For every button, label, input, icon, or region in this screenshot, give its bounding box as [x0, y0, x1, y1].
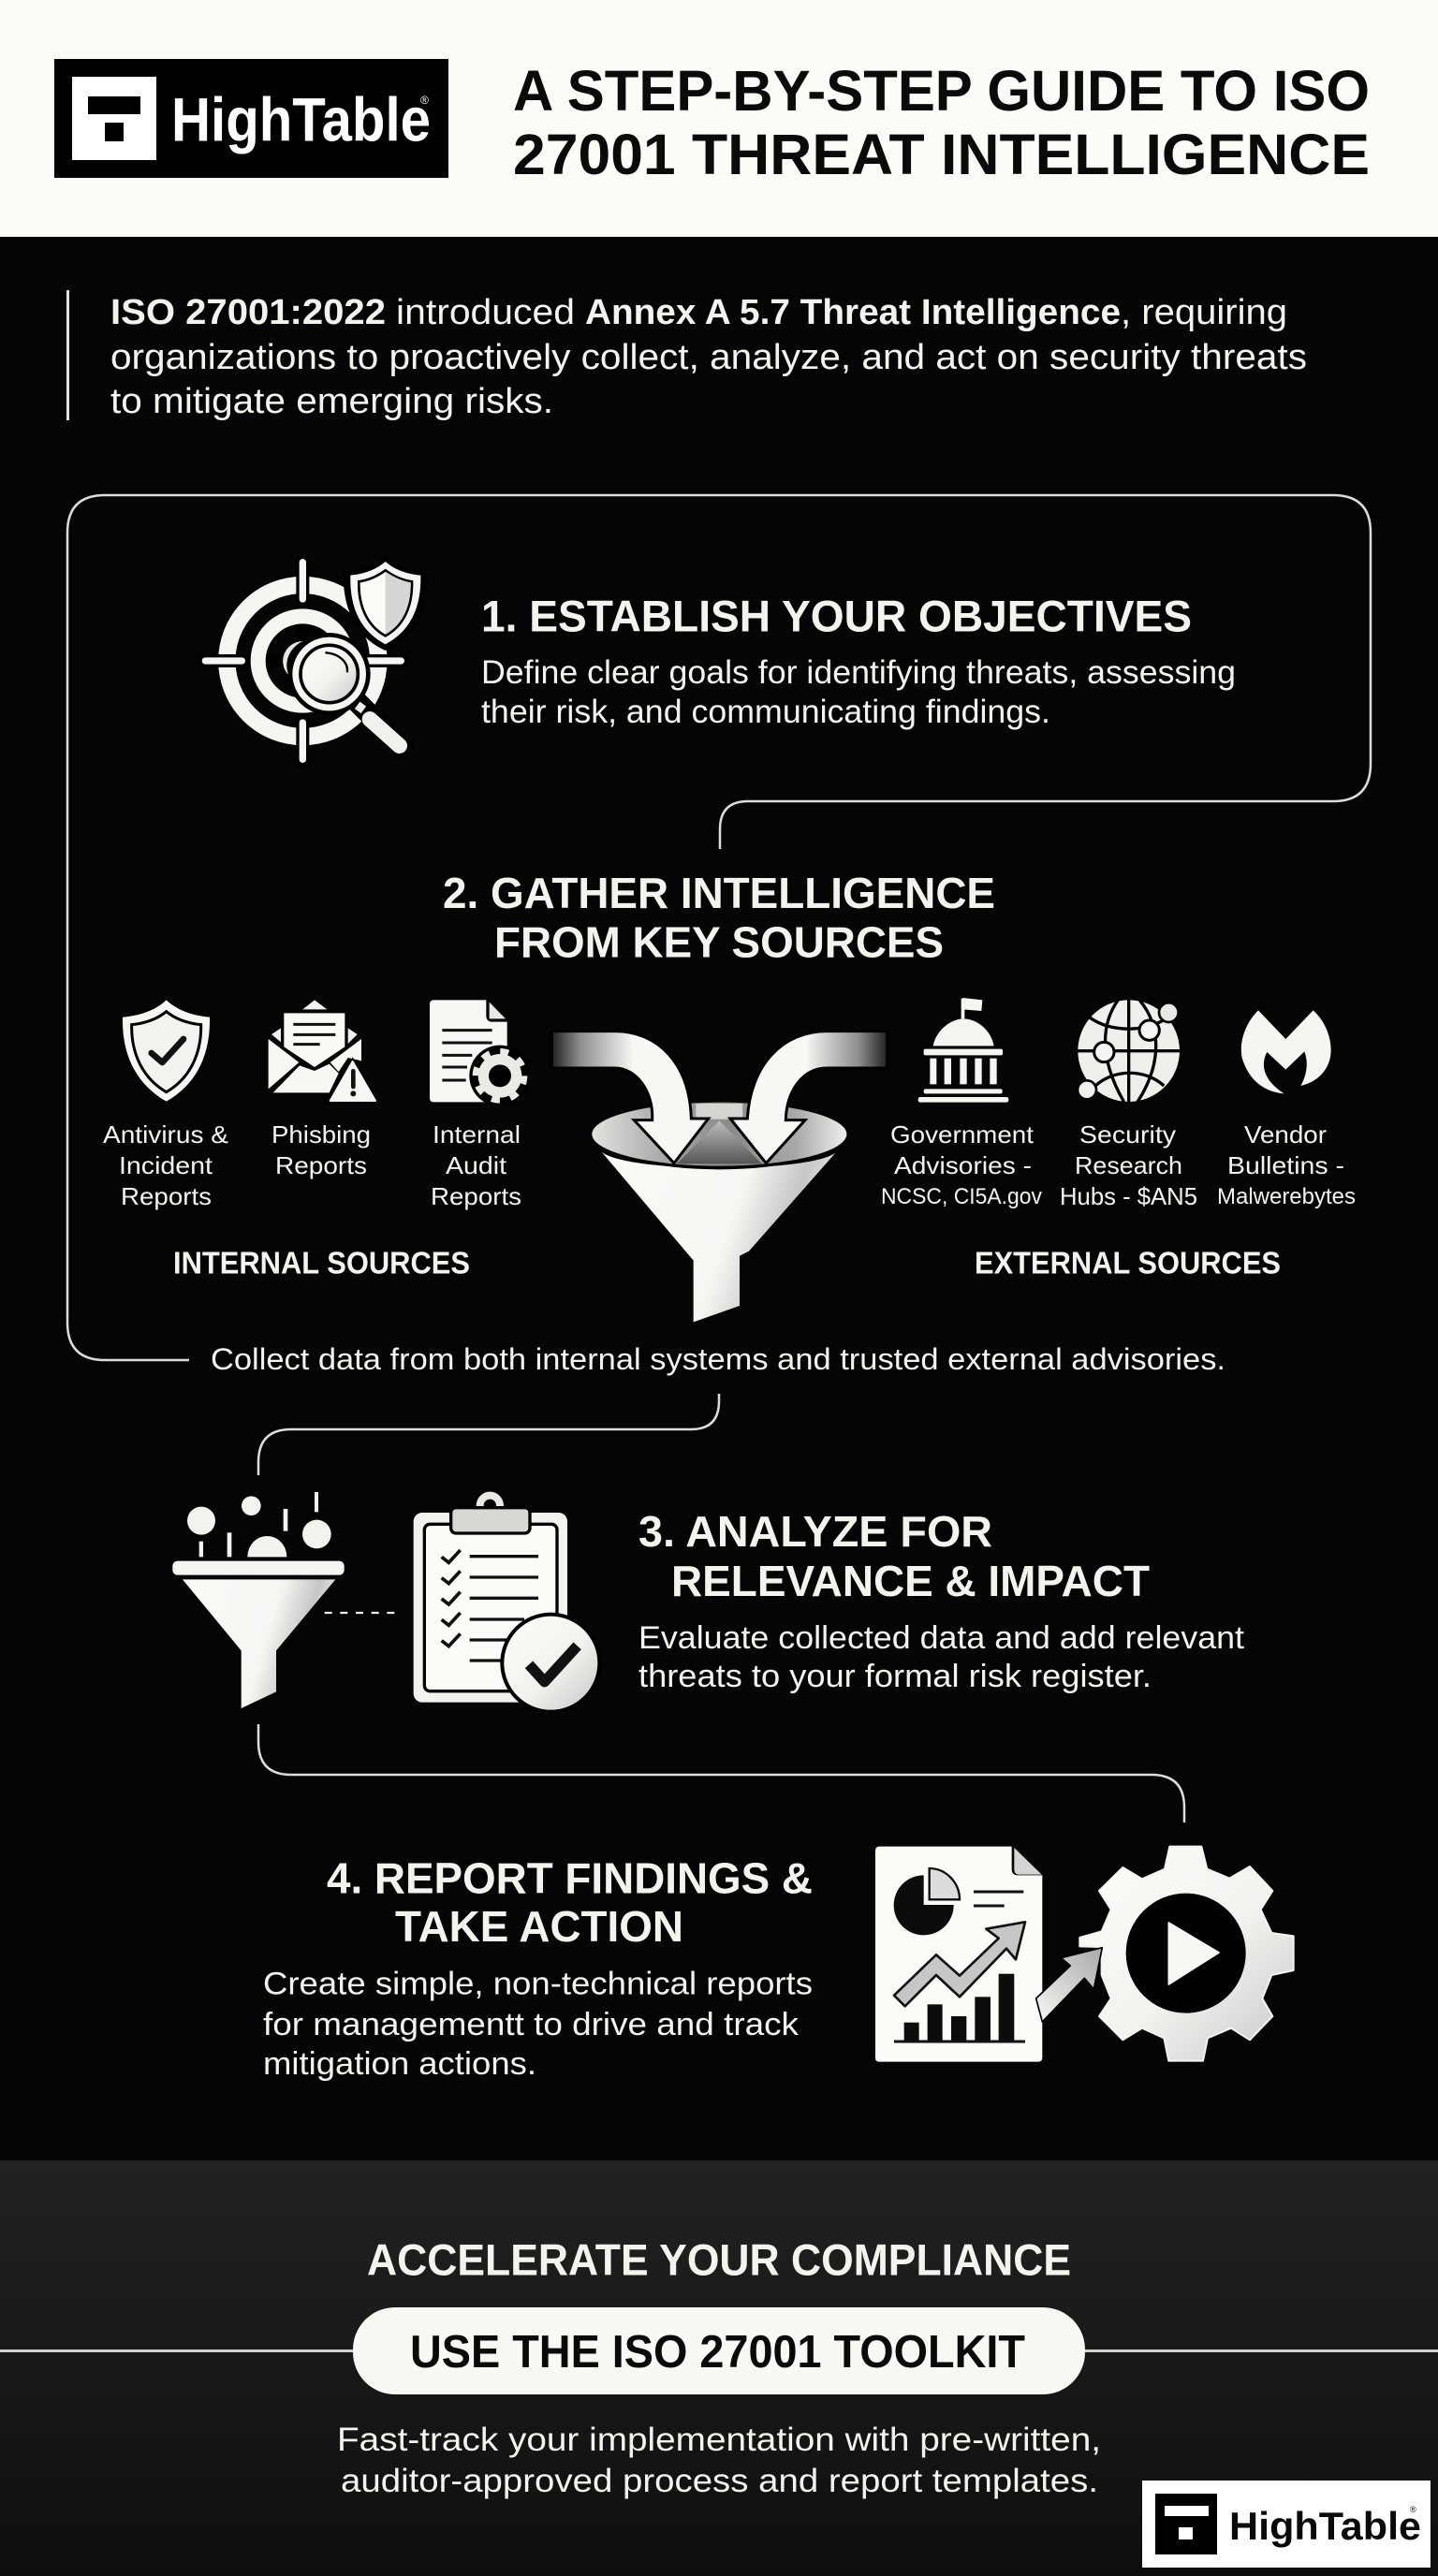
text: internal source labels: Internal [433, 1120, 521, 1149]
title [513, 59, 1370, 186]
arrow: report to action [1036, 1948, 1102, 2022]
icon: central funnel with two arrows [551, 1032, 888, 1322]
icon: target with magnifier and shield [198, 555, 428, 768]
text: internal source labels: Antivirus & [103, 1120, 228, 1149]
heading: step 3: RELEVANCE & IMPACT [671, 1557, 1150, 1605]
text: footer body: Fast-track your implementation with pre-written, [337, 2422, 1101, 2458]
text: footer body [337, 2422, 1101, 2499]
panel: step 3 [172, 1492, 1245, 1714]
heading: step 4: TAKE ACTION [395, 1902, 683, 1951]
button: use the toolkit: USE THE ISO 27001 TOOLKIT [410, 2327, 1025, 2378]
icon: filter funnel with data [172, 1492, 396, 1708]
panel: step 1 [198, 555, 1236, 768]
text: step 1 body [481, 654, 1236, 730]
heading: step 1: 1. ESTABLISH YOUR OBJECTIVES [481, 592, 1192, 640]
logo: HighTable: ® [420, 94, 429, 107]
text: step 4 body: mitigation actions. [263, 2046, 536, 2082]
text: internal source labels: Reports [121, 1182, 212, 1210]
icon: internal audit document with gear [430, 1000, 531, 1106]
icon: report document with charts [875, 1847, 1042, 2062]
panel: footer call to action [0, 2160, 1438, 2576]
heading: internal sources: INTERNAL SOURCES [173, 1245, 470, 1281]
icon: government building [918, 998, 1008, 1103]
intro text block: to mitigate emerging risks. [110, 382, 553, 421]
icon: phishing envelope with warning [269, 1000, 380, 1104]
heading: step 2: FROM KEY SOURCES [494, 917, 944, 966]
logo: footer HighTable: ® [1410, 2505, 1416, 2514]
text: external source labels: Security [1079, 1120, 1176, 1149]
text: step 2 caption: Collect data from both internal systems and trusted external advisories. [211, 1342, 1225, 1376]
icon: clipboard checklist with badge [414, 1492, 601, 1714]
text: step 3 body: threats to your formal risk register. [638, 1659, 1152, 1694]
text: step 3 body [638, 1620, 1245, 1694]
text: internal source labels: Reports [275, 1151, 367, 1179]
text: external source labels: Research [1075, 1151, 1182, 1179]
intro text block [66, 290, 1307, 421]
text: external source labels: NCSC, CI5A.gov [881, 1184, 1042, 1209]
text: internal source labels [103, 1120, 521, 1210]
arrow: connector step 2 to step 3 [258, 1394, 719, 1475]
logo: footer HighTable [1142, 2481, 1431, 2568]
icon: antivirus shield [123, 1000, 210, 1102]
text: step 4 body: for managementt to drive and track [263, 2007, 800, 2042]
intro text block: , requiring [1121, 293, 1287, 332]
text: step 1 body: their risk, and communicating findings. [481, 694, 1050, 730]
heading: accelerate your compliance: ACCELERATE YOUR COMPLIANCE [367, 2235, 1071, 2284]
title: 27001 THREAT INTELLIGENCE [513, 123, 1370, 186]
text: internal source labels: Reports [431, 1182, 521, 1210]
text: external source labels: Malwerebytes [1217, 1184, 1356, 1209]
logo: HighTable [54, 59, 448, 178]
icon: globe network [1077, 999, 1181, 1104]
heading: step 3: 3. ANALYZE FOR [638, 1507, 992, 1556]
heading: step 4 [327, 1853, 813, 1951]
text: internal source labels: Audit [446, 1151, 507, 1179]
text: step 4 body: Create simple, non-technical reports [263, 1966, 813, 2001]
text: external source labels: Bulletins - [1227, 1151, 1344, 1179]
title: A STEP-BY-STEP GUIDE TO ISO [513, 59, 1370, 123]
logo: footer HighTable: HighTable [1229, 2504, 1421, 2548]
panel: header [0, 0, 1438, 237]
intro text block: organizations to proactively collect, analyze, and act on security threats [110, 338, 1307, 377]
text: external source labels: Advisories - [894, 1151, 1032, 1179]
logo: HighTable: HighTable [171, 84, 431, 154]
heading: external sources: EXTERNAL SOURCES [975, 1245, 1281, 1281]
intro text block: Annex A 5.7 Threat Intelligence [585, 293, 1121, 332]
text: external source labels [881, 1120, 1356, 1210]
icon: gear with play button [1079, 1847, 1294, 2061]
intro text block: introduced [396, 293, 575, 332]
text: internal source labels: Incident [119, 1151, 213, 1179]
text: external source labels: Hubs - $AN5 [1060, 1182, 1197, 1210]
intro text block: ISO 27001:2022 [110, 293, 386, 332]
text: internal source labels: Phisbing [271, 1120, 371, 1149]
heading: step 2 [443, 869, 995, 966]
text: external source labels: Vendor [1244, 1120, 1327, 1149]
panel: step 4 [263, 1847, 1294, 2082]
text: footer body: auditor-approved process and report templates. [341, 2463, 1098, 2499]
text: external source labels: Government [890, 1120, 1034, 1149]
heading: step 2: 2. GATHER INTELLIGENCE [443, 869, 995, 917]
panel: step 2 [103, 869, 1356, 1376]
heading: step 4: 4. REPORT FINDINGS & [327, 1853, 813, 1902]
heading: step 3 [638, 1507, 1150, 1605]
text: step 4 body [263, 1966, 813, 2082]
arrow: connector step 3 to step 4 [258, 1724, 1184, 1822]
text: step 1 body: Define clear goals for identifying threats, assessing [481, 654, 1236, 691]
text: step 3 body: Evaluate collected data and add relevant [638, 1620, 1245, 1656]
arrow: flow border around steps 1 and 2 [67, 495, 1371, 1360]
button: use the toolkit [353, 2307, 1085, 2394]
icon: Malwarebytes mark [1241, 1010, 1331, 1093]
